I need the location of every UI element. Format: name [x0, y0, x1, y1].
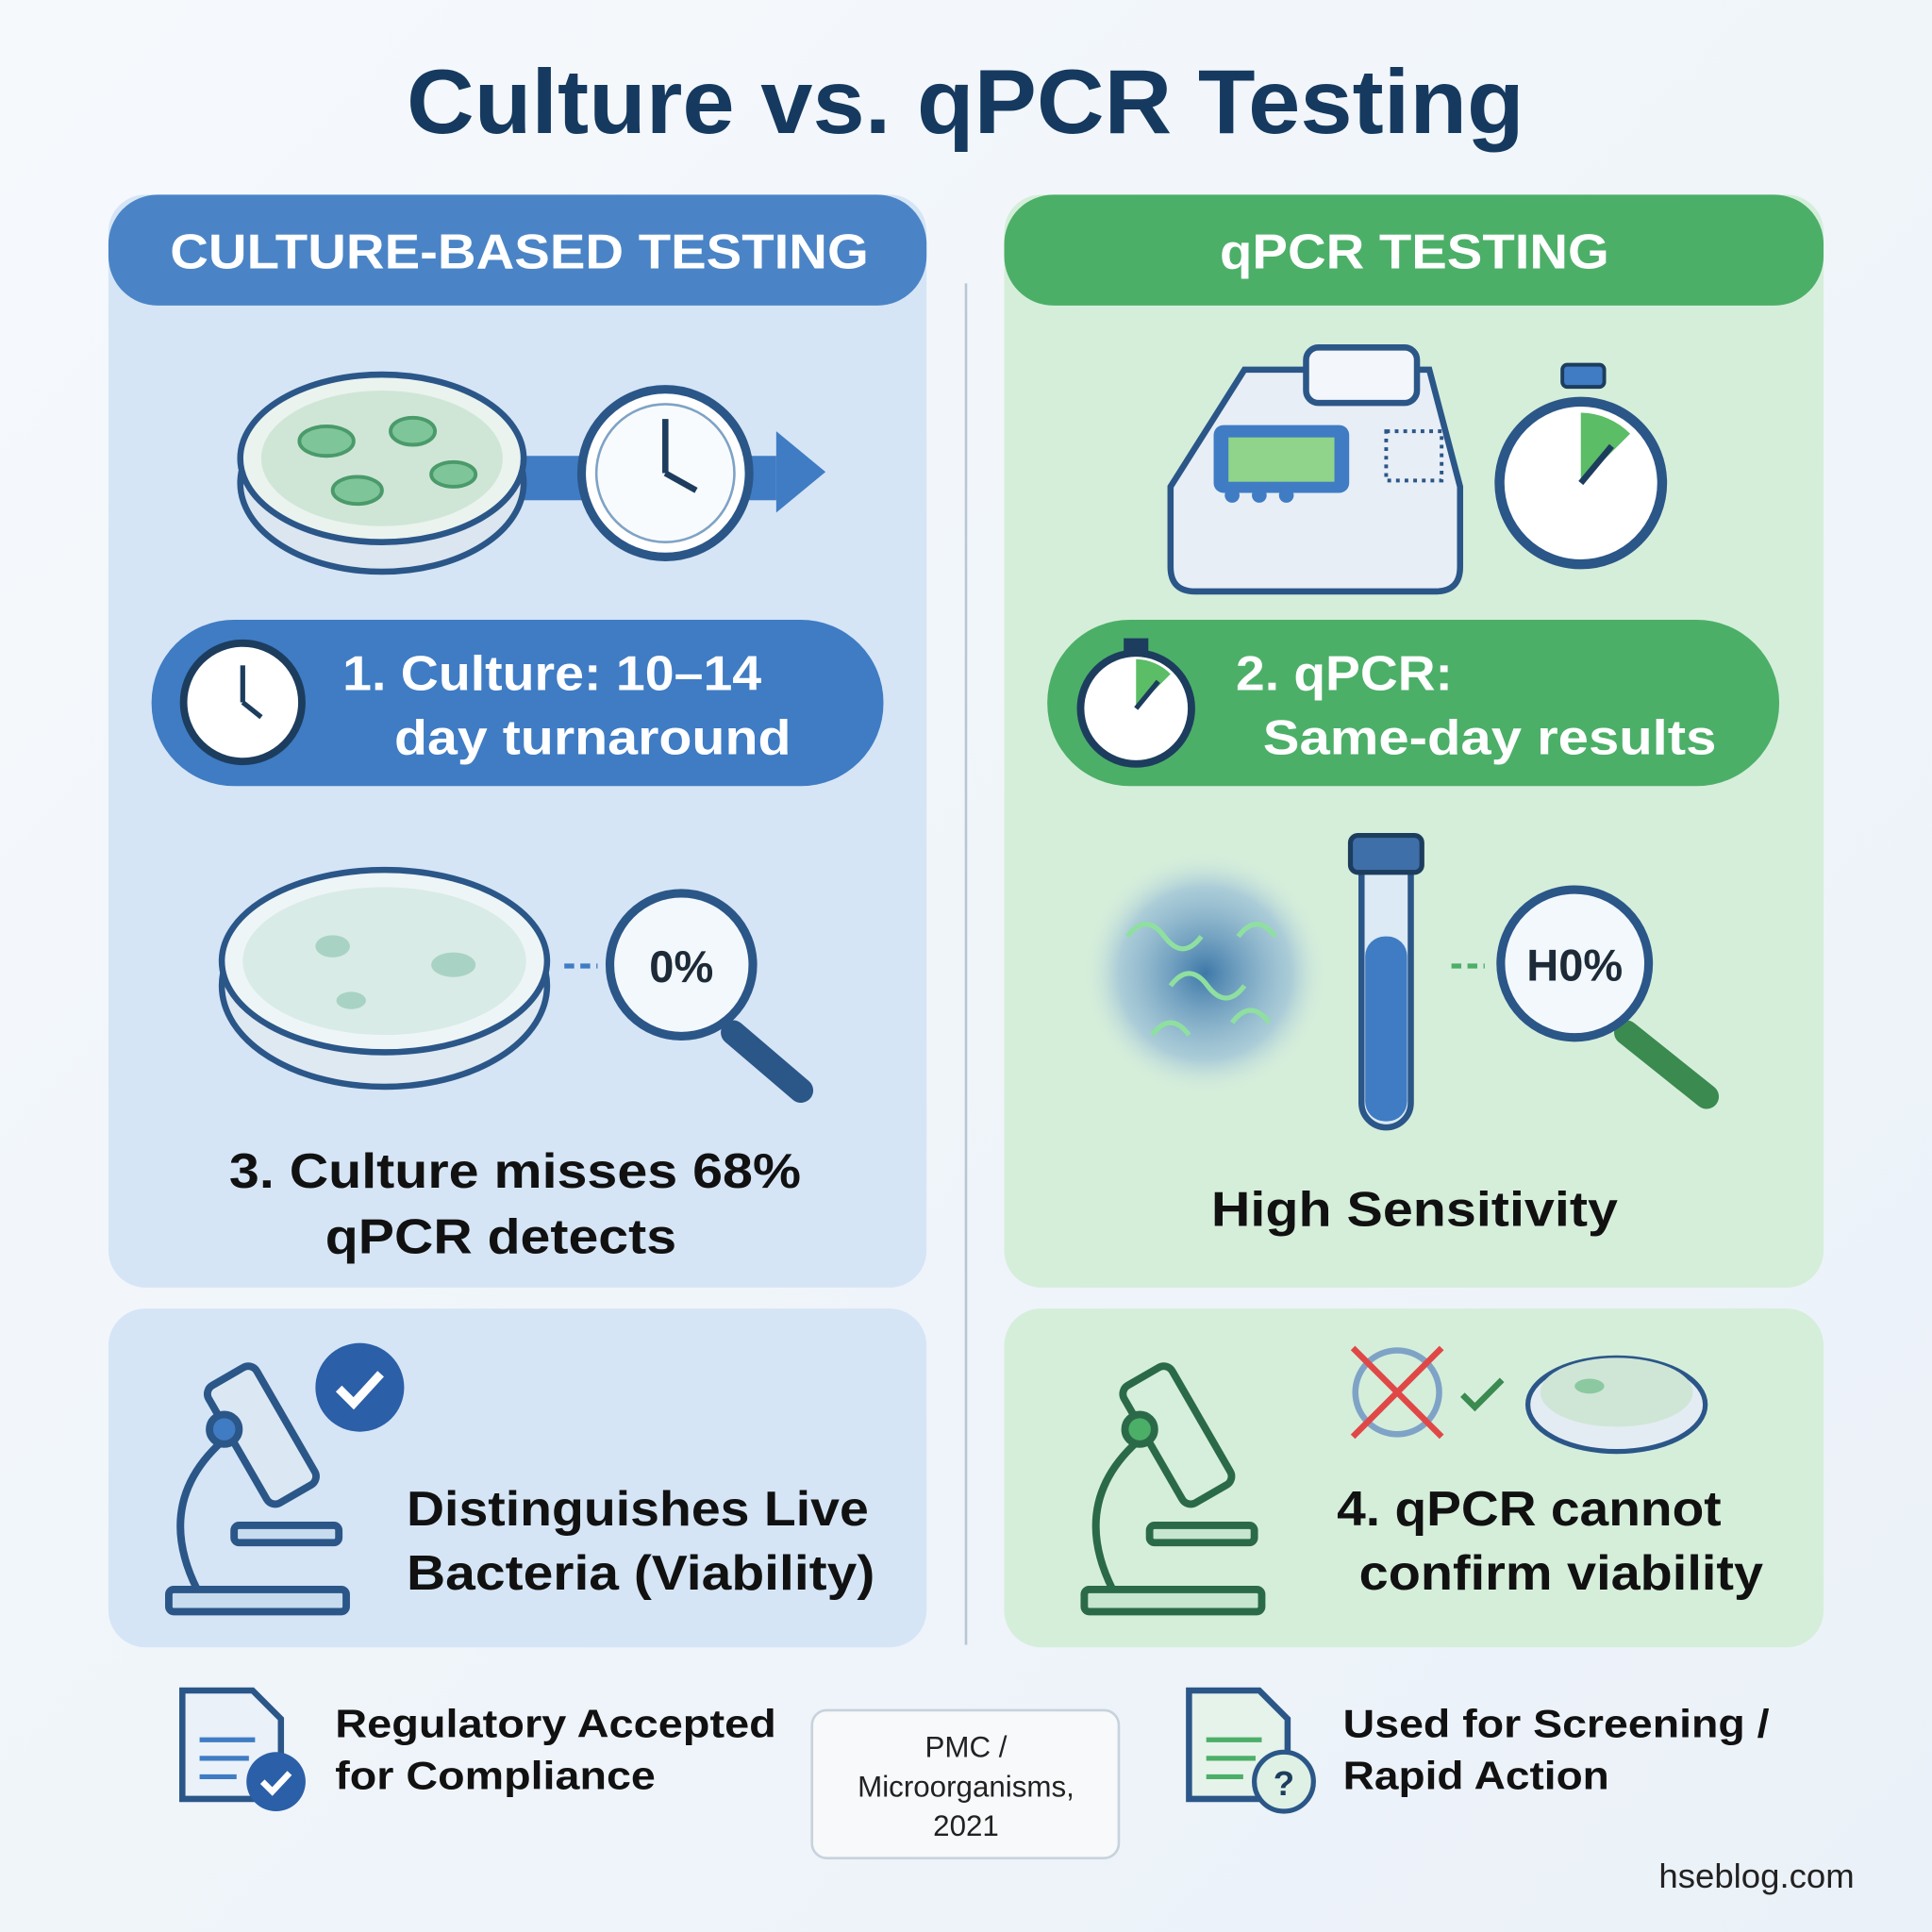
text: distinguishes live bacteria — [407, 1482, 874, 1601]
icon: document with question: ? — [1274, 1764, 1294, 1803]
citation box: PMC / — [924, 1731, 1008, 1764]
footer: screening: Used for Screening / — [1343, 1702, 1770, 1746]
panel: qPCR testing — [1004, 194, 1824, 1288]
icon: DNA cloud, test tube, magnifier: H0% — [1526, 941, 1623, 991]
divider — [965, 283, 967, 1645]
footer: regulatory accepted — [182, 1690, 776, 1811]
text: distinguishes live bacteria: Distinguishes Live — [407, 1482, 869, 1537]
citation box — [812, 1710, 1119, 1858]
pill: culture turnaround: 1. Culture: 10–14 — [342, 646, 761, 701]
icon: check — [315, 1343, 404, 1432]
icon: DNA cloud, test tube, magnifier — [1082, 836, 1707, 1127]
text: culture misses 68% — [229, 1144, 801, 1264]
title: Culture vs. qPCR Testing — [407, 52, 1524, 153]
panel: culture-based testing — [108, 194, 926, 1288]
icon: microscope — [169, 1362, 346, 1611]
heading: culture-based testing: CULTURE-BASED TESTING — [170, 225, 869, 280]
text: culture misses 68%: qPCR detects — [325, 1209, 676, 1264]
icon: clock — [184, 643, 302, 761]
credit: hseblog.com — [1658, 1857, 1855, 1895]
citation box: Microorganisms, — [858, 1770, 1074, 1803]
icon: X, check, petri dish — [1353, 1348, 1706, 1452]
text: qPCR cannot confirm viability: confirm viability — [1359, 1546, 1763, 1601]
footer: screening: Rapid Action — [1343, 1753, 1609, 1797]
icon: petri dish with magnifier 0% — [222, 870, 801, 1091]
heading: qPCR testing: qPCR TESTING — [1220, 225, 1609, 280]
pill: qPCR same-day — [1047, 620, 1779, 786]
text: qPCR cannot confirm viability: 4. qPCR cannot — [1337, 1482, 1722, 1537]
citation box: 2021 — [933, 1809, 999, 1842]
pill: culture turnaround: day turnaround — [394, 710, 791, 765]
footer: regulatory accepted: Regulatory Accepted — [335, 1702, 776, 1746]
text: qPCR cannot confirm viability — [1337, 1482, 1763, 1601]
heading: culture-based testing — [108, 194, 926, 306]
pill: qPCR same-day: Same-day results — [1263, 710, 1716, 765]
icon: document with check — [182, 1690, 306, 1811]
icon: stopwatch — [1080, 639, 1191, 764]
icon: petri dish with magnifier 0%: 0% — [649, 941, 713, 991]
pill: qPCR same-day: 2. qPCR: — [1236, 646, 1453, 701]
icon: document with question — [1189, 1690, 1313, 1811]
pill: culture turnaround — [152, 620, 883, 786]
text: high sensitivity: High Sensitivity — [1211, 1183, 1618, 1238]
footer: regulatory accepted: for Compliance — [335, 1753, 656, 1797]
heading: qPCR testing — [1004, 194, 1824, 306]
icon: petri dish with clock and arrow — [241, 375, 825, 572]
icon: qPCR machine and stopwatch — [1171, 347, 1662, 591]
panel: viability (culture) — [108, 1308, 926, 1647]
panel: viability (qPCR) — [1004, 1308, 1824, 1647]
footer: screening — [1189, 1690, 1770, 1811]
text: culture misses 68%: 3. Culture misses 68% — [229, 1144, 801, 1199]
text: distinguishes live bacteria: Bacteria (Viability) — [407, 1546, 874, 1601]
icon: microscope — [1084, 1362, 1261, 1611]
